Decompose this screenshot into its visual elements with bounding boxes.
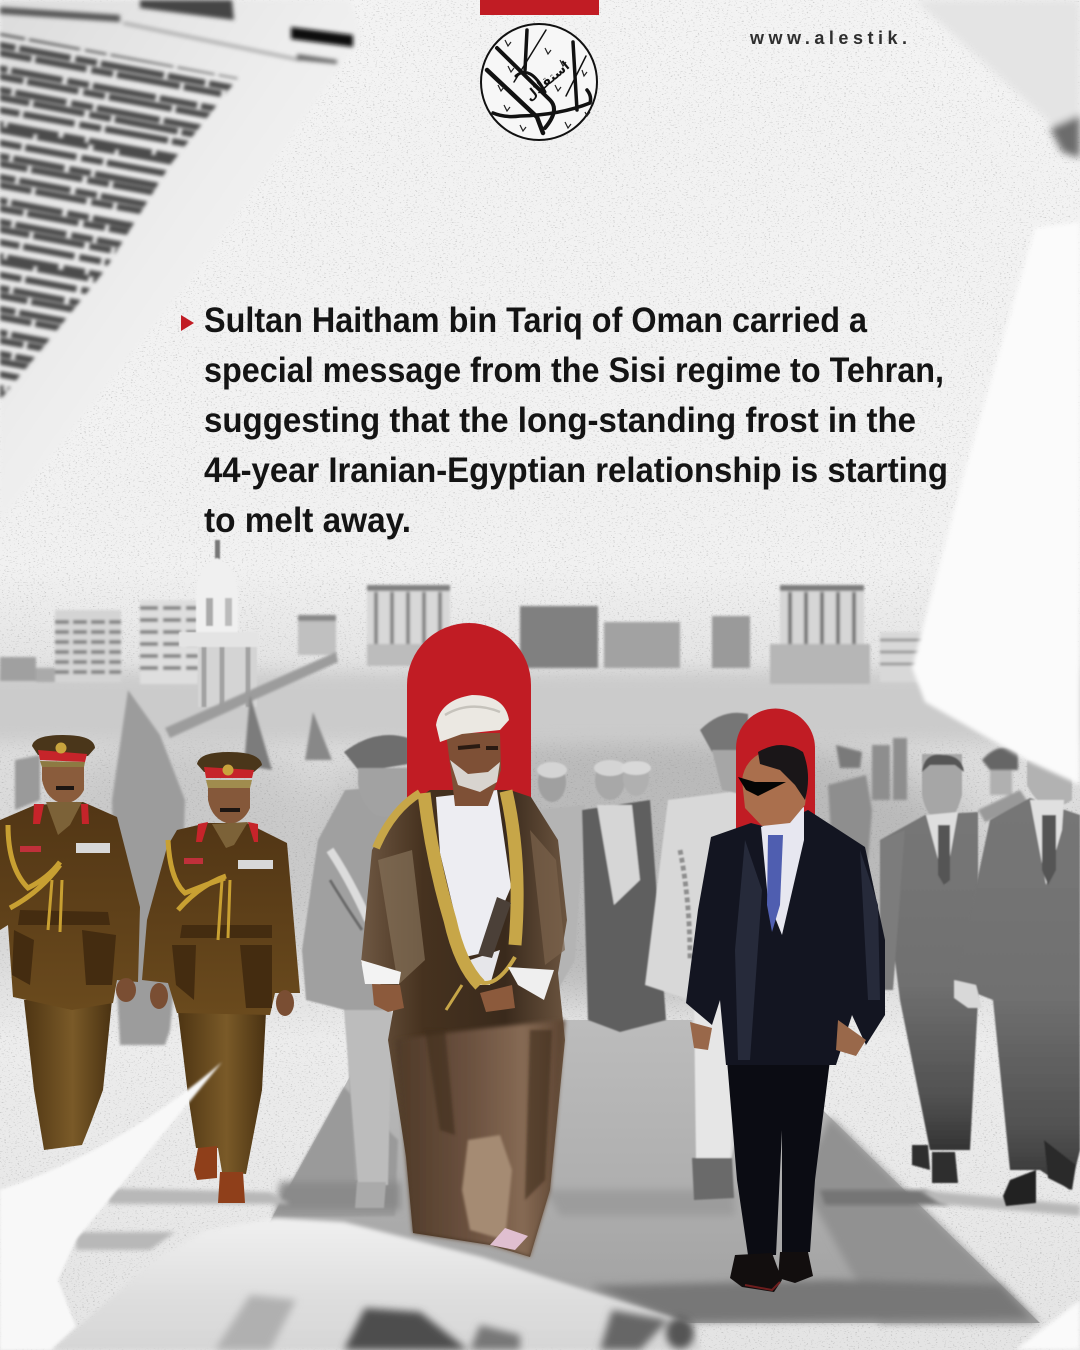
soldier two — [142, 752, 300, 1203]
pockets and belt — [12, 910, 116, 985]
collar tabs — [196, 822, 258, 842]
lower robe drape — [396, 1020, 565, 1257]
white thawb — [436, 790, 511, 957]
robe upper — [361, 790, 567, 1257]
jacket — [686, 810, 885, 1065]
diagonal banner and flags — [15, 652, 338, 1045]
suited man one — [880, 754, 978, 1183]
background crowd in grey — [15, 652, 1080, 1208]
grey officer left of the Sultan — [302, 735, 410, 1208]
Sultan Haitham figure — [361, 695, 567, 1257]
jacket — [0, 802, 140, 1010]
shirt collar — [46, 802, 82, 835]
city skyline — [0, 585, 1080, 742]
gold aiguillette — [8, 825, 62, 932]
minaret — [179, 540, 258, 707]
turban — [436, 695, 509, 742]
gold aiguillette — [168, 840, 230, 940]
grey robed dignitaries — [535, 760, 666, 1032]
shoes — [730, 1253, 782, 1292]
colonnade building — [367, 585, 450, 666]
pockets and belt — [172, 925, 272, 1008]
main statement: to melt away. — [204, 501, 411, 540]
face — [208, 786, 250, 824]
trousers — [727, 1060, 830, 1255]
main statement: special message from the Sisi regime to Tehran, — [204, 351, 944, 390]
soldier one — [0, 735, 140, 1150]
blurred book text — [215, 1295, 694, 1350]
trousers — [24, 1000, 112, 1150]
hand — [116, 978, 136, 1002]
face — [42, 765, 84, 804]
head — [742, 748, 808, 826]
beard — [450, 760, 500, 792]
grey officer behind Sisi — [645, 713, 748, 1200]
blurred masthead — [0, 0, 337, 64]
newspaper top right — [915, 0, 1080, 158]
decorative ticks — [498, 40, 590, 131]
cap — [32, 735, 95, 767]
hands — [690, 1022, 712, 1050]
medals — [238, 860, 273, 869]
jacket highlights — [735, 840, 880, 1060]
text bullet arrow — [181, 315, 194, 331]
President Sisi figure — [686, 745, 885, 1292]
hands — [372, 984, 404, 1012]
emblem wordmark: استقلال — [523, 59, 573, 104]
striped building — [55, 610, 121, 682]
distant honour guard — [978, 748, 1030, 822]
open book bottom — [52, 1218, 702, 1350]
logo emblem — [481, 24, 597, 140]
white paper bottom right — [1015, 1300, 1080, 1350]
carpet — [214, 1020, 1040, 1323]
right cuff — [508, 967, 554, 1000]
left cuff — [361, 960, 401, 984]
hair — [758, 745, 808, 800]
newspaper top left — [0, 0, 362, 522]
calligraphic strokes — [487, 30, 591, 133]
hem — [490, 1228, 528, 1250]
white paper right — [912, 222, 1080, 785]
main statement: suggesting that the long-standing frost in the — [204, 401, 916, 440]
distant soldiers — [828, 738, 907, 860]
red arch behind the Sultan — [407, 623, 531, 815]
red top bar — [480, 0, 599, 15]
blurred newspaper columns — [0, 31, 239, 400]
main statement: Sultan Haitham bin Tariq of Oman carried a — [204, 301, 867, 340]
dagger — [478, 897, 511, 958]
fold shadows — [425, 1030, 552, 1200]
red arch behind Sisi — [736, 708, 815, 840]
colonnade building right — [770, 585, 870, 684]
ground shadows — [76, 1188, 1080, 1250]
neck and face — [446, 733, 501, 806]
striped building two — [140, 600, 198, 684]
grey suited men on the right — [880, 748, 1080, 1206]
facial features — [458, 746, 498, 748]
shoes — [194, 1146, 245, 1203]
shirt — [761, 807, 804, 935]
fold highlight — [462, 1135, 512, 1240]
blurred headline — [291, 27, 353, 47]
medals — [76, 843, 110, 853]
jacket — [142, 823, 300, 1015]
paper sheet bottom left — [0, 1062, 222, 1350]
gold trim — [376, 791, 517, 1010]
suited man two — [954, 760, 1080, 1206]
website address: www.alestik. — [749, 28, 907, 48]
main statement: 44-year Iranian-Egyptian relationship is starting — [204, 451, 948, 490]
trousers — [178, 1012, 266, 1174]
collar tabs — [33, 804, 89, 824]
hands — [150, 983, 168, 1009]
tie — [767, 835, 783, 932]
cap — [197, 752, 262, 788]
sunglasses — [738, 777, 786, 796]
shirt collar — [212, 822, 248, 848]
